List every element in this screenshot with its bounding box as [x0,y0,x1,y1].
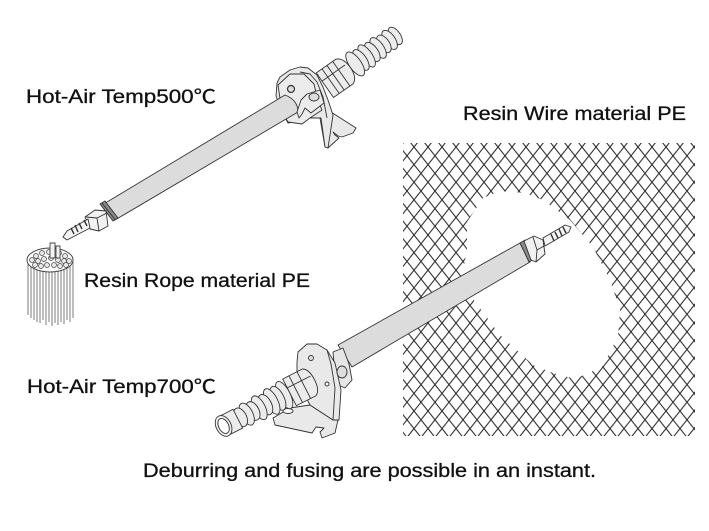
upright plate [297,344,341,420]
plate screw [337,366,347,378]
clamp block [278,74,322,124]
bracket foot [273,405,338,438]
label: hot-air temp 500: Hot-Air Temp500℃ [26,87,216,108]
heater tube [338,243,530,367]
nut [85,210,108,231]
barbed nozzle [63,219,90,240]
label: resin wire material: Resin Wire material PE [463,104,686,125]
clamp block [333,348,352,388]
strands [28,262,73,326]
plate holes [308,356,314,360]
threaded collar [520,240,534,262]
barbed nozzle [543,225,571,246]
label: resin rope material: Resin Rope material PE [84,271,310,292]
nut [524,236,545,262]
corrugated hose [316,21,408,97]
threaded collar [100,201,118,221]
label: hot-air temp 700: Hot-Air Temp700℃ [27,377,216,398]
wire mesh with cleared hole [403,143,695,436]
tube bolt [288,86,294,92]
top heater torch [63,21,408,240]
strand ends [27,248,73,272]
foot hole [283,408,293,414]
center pins [50,243,60,258]
heater tube [102,95,298,220]
bracket foot [320,112,356,148]
resin rope bundle [27,243,73,326]
rear plate and clamp [276,67,333,148]
caption: Deburring and fusing are possible in an instant. [143,461,596,482]
bottom heater torch [210,225,571,443]
clamp screw [297,90,324,118]
corrugated hose [210,366,321,443]
